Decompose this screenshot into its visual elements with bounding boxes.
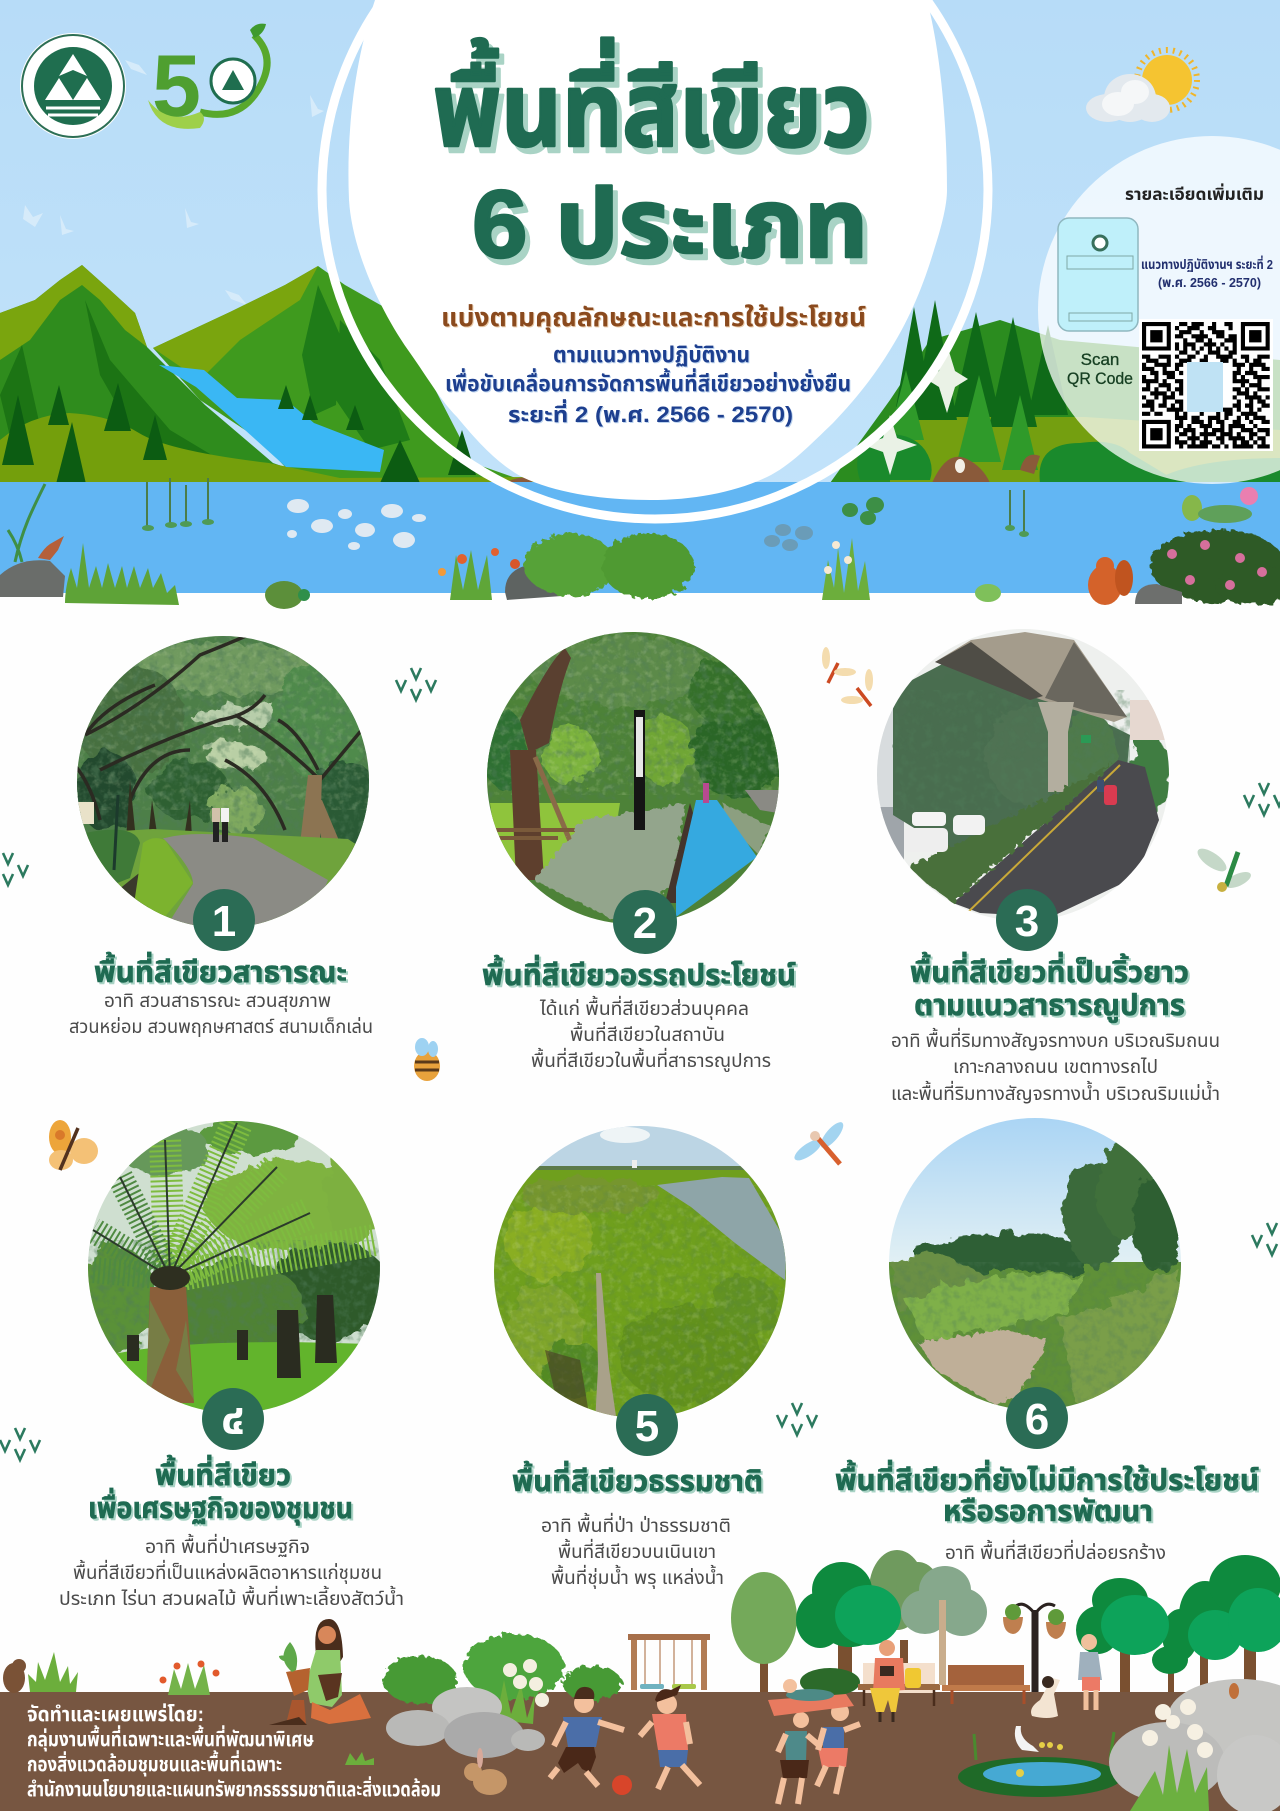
decorative ring around title disc xyxy=(322,0,988,519)
right forest xyxy=(505,300,1280,483)
description 5 xyxy=(541,1512,731,1589)
icon: blue dragonfly xyxy=(791,1119,847,1164)
description 5: พื้นที่ชุ่มน้ำ พรุ แหล่งน้ำ xyxy=(551,1564,724,1589)
figure: boy with ball xyxy=(550,1687,632,1795)
badge 1: 1 xyxy=(212,897,236,946)
heading 2: พื้นที่สีเขียวอรรถประโยชน์ xyxy=(482,954,796,992)
icon: frog pair xyxy=(975,584,1001,602)
guideline caption: เพื่อขับเคลื่อนการจัดการพื้นที่สีเขียวอย่างยั่งยืน xyxy=(445,368,851,396)
scan label: QR Code xyxy=(1067,369,1133,388)
description 2: พื้นที่สีเขียวในสถาบัน xyxy=(570,1021,725,1046)
logo: office seal xyxy=(20,33,126,139)
icon: boulders and daisies xyxy=(1109,1679,1280,1811)
photo 1: public park xyxy=(77,636,369,925)
description 2: พื้นที่สีเขียวในพื้นที่สาธารณูปการ xyxy=(531,1047,771,1073)
description 5: อาทิ พื้นที่ป่า ป่าธรรมชาติ xyxy=(541,1512,731,1537)
badge 6 xyxy=(1006,1387,1068,1449)
description 4: อาทิ พื้นที่ป่าเศรษฐกิจ xyxy=(145,1533,310,1558)
heading 3: ตามแนวสาธารณูปการ xyxy=(914,990,1185,1023)
icon: meadow flowers xyxy=(822,538,870,600)
left mountains xyxy=(0,265,540,484)
subtitle: แบ่งตามคุณลักษณะและการใช้ประโยชน์ xyxy=(441,302,866,333)
icon: small grass on ground xyxy=(345,1752,374,1765)
icon: guideline booklet xyxy=(1058,218,1138,331)
badge 2: 2 xyxy=(633,899,657,948)
booklet label xyxy=(1141,255,1273,290)
description 2 xyxy=(531,995,771,1073)
badge 4 xyxy=(202,1388,264,1450)
description 4: ประเภท ไร่นา สวนผลไม้ พื้นที่เพาะเลี้ยงสัตว์น้ำ xyxy=(59,1585,404,1610)
icon: flowers and central bushes xyxy=(438,533,694,600)
park trees xyxy=(731,1550,1280,1695)
figure: lying reader xyxy=(768,1668,860,1716)
heading 6: หรือรอการพัฒนา xyxy=(943,1496,1153,1528)
description 1 xyxy=(69,991,373,1038)
guideline caption: ตามแนวทางปฏิบัติงาน xyxy=(553,342,750,367)
title xyxy=(433,38,870,278)
badge 5: 5 xyxy=(635,1402,659,1451)
icon: bushes xyxy=(383,1634,622,1704)
badge 6: 6 xyxy=(1025,1395,1049,1444)
photo 5: natural mangrove xyxy=(490,1120,790,1430)
badge 1 xyxy=(193,889,255,951)
header scene background xyxy=(0,0,1280,600)
photo 2: utility green space xyxy=(487,632,779,923)
ground xyxy=(0,1692,1280,1811)
title disc xyxy=(348,0,947,500)
photo 6: undeveloped green space xyxy=(885,1115,1185,1420)
figure: gardening woman xyxy=(269,1619,371,1725)
white lower page background xyxy=(0,593,1280,1692)
icon: bee xyxy=(414,1038,440,1081)
panel: further details xyxy=(1038,136,1280,484)
credits: กองสิ่งแวดล้อมชุมชนและพื้นที่เฉพาะ xyxy=(27,1750,282,1776)
guideline caption xyxy=(445,342,851,427)
badge 5 xyxy=(616,1394,678,1456)
heading 4 xyxy=(88,1454,353,1525)
logo: 50th anniversary: 5 xyxy=(152,36,201,135)
description 3: และพื้นที่ริมทางสัญจรทางน้ำ บริเวณริมแม่น้ำ xyxy=(891,1080,1220,1105)
heading 6 xyxy=(835,1459,1259,1528)
figure: girl running xyxy=(640,1685,700,1789)
icon: daisies xyxy=(496,1659,549,1724)
scan label: Scan xyxy=(1081,350,1119,369)
heading 5: พื้นที่สีเขียวธรรมชาติ xyxy=(512,1460,763,1498)
figure: man with dog xyxy=(1031,1634,1102,1718)
badge 3: 3 xyxy=(1015,897,1039,946)
description 2: ได้แก่ พื้นที่สีเขียวส่วนบุคคล xyxy=(539,995,749,1020)
booklet label: (พ.ศ. 2566 - 2570) xyxy=(1158,275,1261,290)
icon: butterfly xyxy=(49,1120,98,1170)
badge 3 xyxy=(996,889,1058,951)
photo 3: linear roadside green xyxy=(870,625,1180,925)
credits: จัดทำและเผยแพร่โดย: xyxy=(27,1704,204,1726)
icon: turtle xyxy=(265,581,310,609)
credits xyxy=(27,1704,441,1801)
icon: fish schools xyxy=(287,499,813,551)
QR code xyxy=(1139,319,1273,451)
description 4 xyxy=(59,1533,404,1610)
icon: small flowers xyxy=(160,1660,220,1695)
icon: orange dragonflies xyxy=(822,647,873,706)
icon: swing xyxy=(628,1637,710,1690)
icon: rocks xyxy=(386,1687,545,1758)
heading 4: เพื่อเศรษฐกิจของชุมชน xyxy=(88,1487,353,1525)
description 3: อาทิ พื้นที่ริมทางสัญจรทางบก บริเวณริมถนน xyxy=(891,1027,1220,1052)
icon: water reeds xyxy=(8,478,1029,562)
badge 2 xyxy=(613,890,677,954)
credits: กลุ่มงานพื้นที่เฉพาะและพื้นที่พัฒนาพิเศษ xyxy=(27,1725,314,1751)
further details heading: รายละเอียดเพิ่มเติม xyxy=(1125,183,1264,204)
figures: jogging couple xyxy=(778,1703,860,1804)
heading 4: พื้นที่สีเขียว xyxy=(155,1454,291,1492)
water band xyxy=(0,482,1280,594)
scan label xyxy=(1067,350,1133,388)
heading 3: พื้นที่สีเขียวที่เป็นริ้วยาว xyxy=(910,951,1189,989)
description 6: อาทิ พื้นที่สีเขียวที่ปล่อยรกร้าง xyxy=(945,1539,1166,1564)
logo: 50th anniversary xyxy=(148,24,267,135)
description 1: อาทิ สวนสาธารณะ สวนสุขภาพ xyxy=(104,991,331,1012)
badge 4: ๔ xyxy=(221,1395,245,1444)
benches and reading woman xyxy=(858,1600,1030,1722)
heading 1: พื้นที่สีเขียวสาธารณะ xyxy=(94,951,347,989)
icon: rabbit xyxy=(464,1748,507,1795)
icon: lily pads xyxy=(842,497,884,525)
description 5: พื้นที่สีเขียวบนเนินเขา xyxy=(558,1538,716,1563)
icon: lamp post xyxy=(1003,1604,1066,1692)
icon: squirrel and grass xyxy=(3,1652,78,1693)
title: พื้นที่สีเขียว xyxy=(433,38,870,169)
guideline caption: ระยะที่ 2 (พ.ศ. 2566 - 2570) xyxy=(508,399,793,427)
icon: squirrel, rose bush and frog xyxy=(1088,487,1280,605)
icon: grass tufts xyxy=(0,668,1280,1460)
icon: bird on rock with grass xyxy=(0,536,179,605)
description 4: พื้นที่สีเขียวที่เป็นแหล่งผลิตอาหารแก่ชุมชน xyxy=(73,1559,382,1584)
icon: pond with duck xyxy=(958,1726,1122,1797)
photo 4: economic palm plantation xyxy=(88,1121,380,1410)
icon: green dragonfly xyxy=(1194,845,1253,892)
title: 6 ประเภท xyxy=(472,171,868,278)
heading 3 xyxy=(910,951,1189,1023)
credits: สำนักงานนโยบายและแผนทรัพยากรธรรมชาติและสิ่งแวดล้อม xyxy=(27,1776,441,1801)
description 1: สวนหย่อม สวนพฤกษศาสตร์ สนามเด็กเล่น xyxy=(69,1015,373,1038)
heading 6: พื้นที่สีเขียวที่ยังไม่มีการใช้ประโยชน์ xyxy=(835,1459,1259,1497)
description 3: เกาะกลางถนน เขตทางรถไป xyxy=(953,1057,1158,1078)
description 3 xyxy=(891,1027,1220,1105)
icon: sun and cloud xyxy=(1086,50,1197,122)
